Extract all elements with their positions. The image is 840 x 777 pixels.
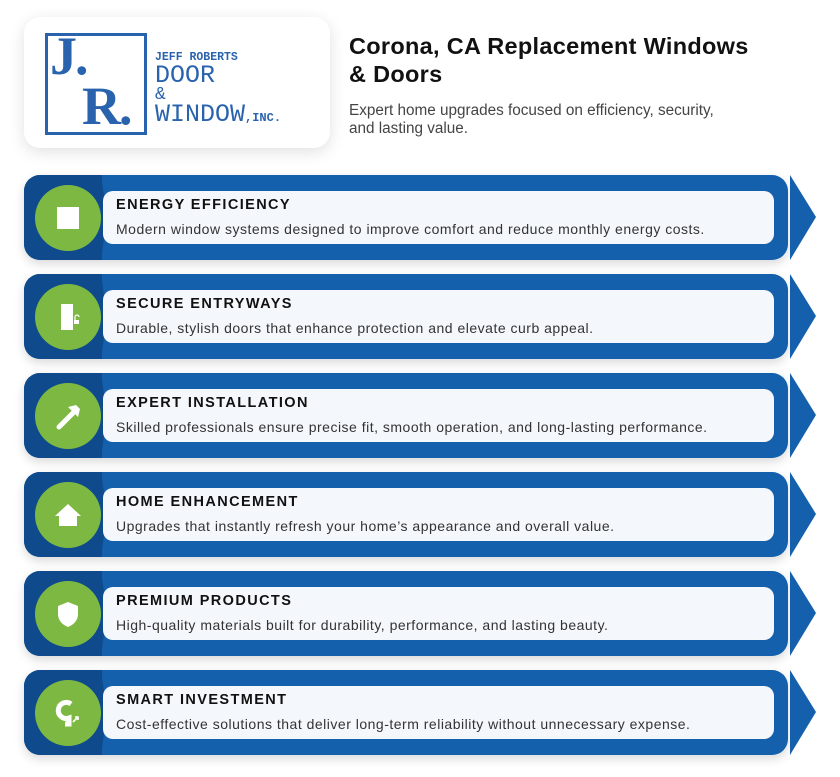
logo mark	[45, 33, 147, 135]
subtitle: Expert home upgrades focused on efficiency, security,	[349, 102, 714, 119]
panel: secure entryways: Durable, stylish doors that enhance protection and elevate curb appeal.	[116, 320, 594, 336]
panel: home enhancement: Upgrades that instantly refresh your home’s appearance and overall value.	[116, 518, 615, 534]
icon: shield	[35, 581, 101, 647]
panel: smart investment: Cost-effective solutions that deliver long-term reliability without unnecessary expense.	[116, 716, 690, 732]
title: Corona, CA Replacement Windows	[349, 33, 749, 59]
panel: secure entryways: SECURE ENTRYWAYS	[116, 296, 293, 312]
logo letters: J.	[50, 26, 86, 86]
panel: expert installation	[20, 373, 816, 466]
icon: house	[35, 482, 101, 548]
panel: energy efficiency	[20, 175, 816, 268]
title: & Doors	[349, 61, 442, 87]
icon: window	[35, 185, 101, 251]
logo letters: R.	[82, 76, 130, 136]
logo wordmark: JEFF ROBERTS	[155, 51, 238, 64]
logo card	[24, 17, 330, 148]
subtitle	[349, 102, 714, 137]
logo wordmark: DOOR	[155, 61, 215, 90]
panel: secure entryways	[20, 274, 816, 366]
panel: premium products: High-quality materials built for durability, performance, and lasting beauty.	[116, 617, 608, 633]
logo wordmark: &	[155, 85, 166, 105]
logo wordmark	[155, 51, 281, 129]
icon: wrench	[35, 383, 101, 449]
panel: home enhancement: HOME ENHANCEMENT	[116, 494, 299, 510]
panel: premium products: PREMIUM PRODUCTS	[116, 593, 292, 609]
panel: expert installation: Skilled professionals ensure precise fit, smooth operation, and long-lasting performance.	[116, 419, 708, 435]
panel: smart investment: SMART INVESTMENT	[116, 692, 287, 708]
panel: expert installation: EXPERT INSTALLATION	[116, 395, 309, 411]
icon: piggy growth	[35, 680, 101, 746]
icon: door	[35, 284, 101, 350]
panel: energy efficiency: ENERGY EFFICIENCY	[116, 197, 291, 213]
subtitle: and lasting value.	[349, 120, 468, 137]
panel: smart investment	[20, 670, 816, 762]
panel: premium products	[20, 571, 816, 664]
title	[349, 33, 749, 87]
logo wordmark: WINDOW,INC.	[155, 100, 281, 129]
panel: energy efficiency: Modern window systems designed to improve comfort and reduce monthly energy costs.	[116, 221, 705, 237]
panel: home enhancement	[20, 472, 816, 564]
logo letters	[50, 26, 130, 136]
